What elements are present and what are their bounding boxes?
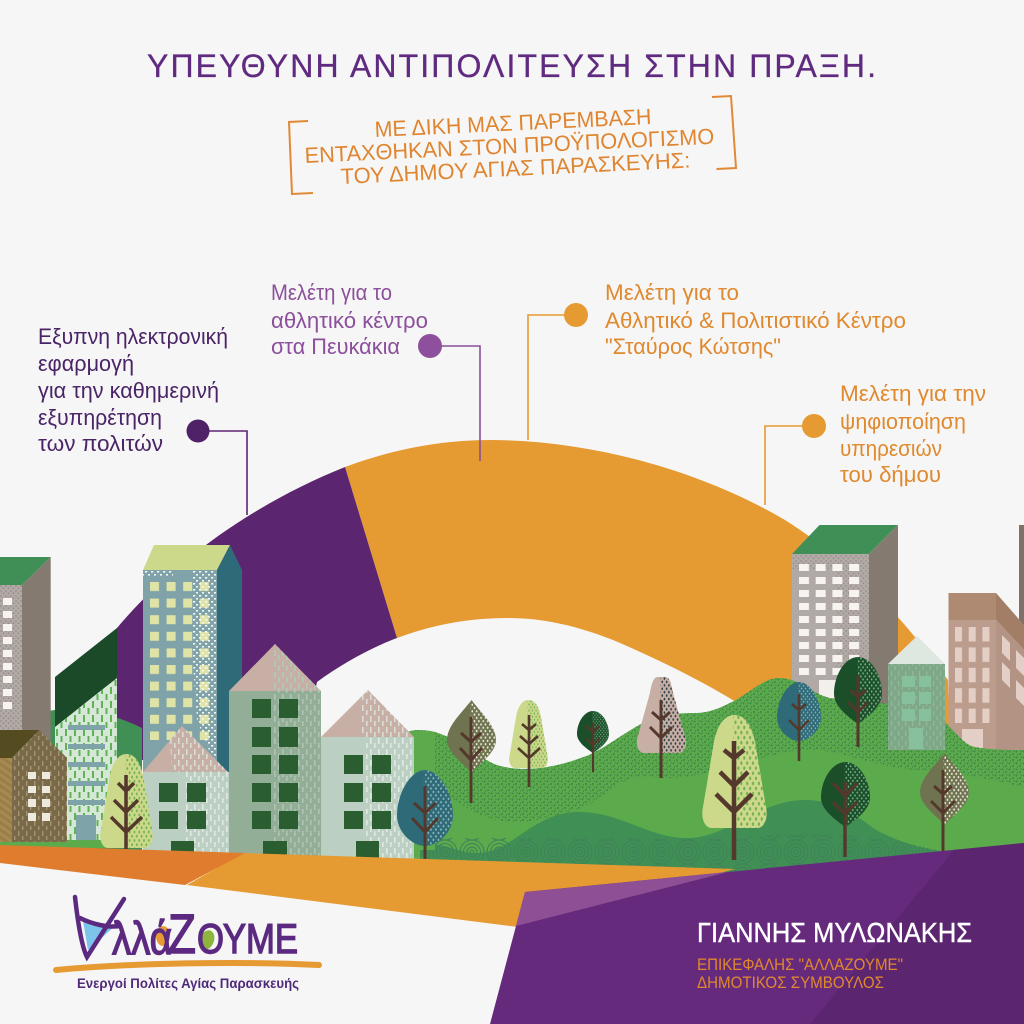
- callout text: Μελέτη για το: [605, 280, 739, 305]
- callout: digitisation: [765, 381, 986, 505]
- tree: small dark: [577, 711, 609, 772]
- logo wordmark: ΟΥΜΕ: [197, 915, 298, 962]
- tree: blue: [777, 682, 821, 761]
- tree: teal: [397, 770, 453, 862]
- callout text: "Σταύρος Κώτσης": [605, 334, 781, 359]
- role: ΕΠΙΚΕΦΑΛΗΣ "ΑΛΛΑΖΟΥΜΕ": [697, 955, 903, 974]
- wooden house: [0, 730, 67, 842]
- callout text: των πολιτών: [38, 431, 163, 456]
- logo mark: blue triangle: [83, 921, 115, 950]
- tree: pink cone: [637, 677, 686, 778]
- marker: [418, 334, 442, 358]
- callout: smart app: [38, 324, 247, 515]
- callout text: Αθλητικό & Πολιτιστικό Κέντρο: [605, 308, 906, 333]
- stippled hill band: [400, 678, 1024, 822]
- callout text: του δήμου: [840, 462, 941, 487]
- callout: sports centre Pefkakia: [271, 280, 480, 461]
- callout text: εφαρμογή: [38, 351, 134, 376]
- leader line: [528, 315, 576, 440]
- darker front hill: [420, 800, 945, 880]
- marker: [564, 303, 588, 327]
- logo wordmark: [112, 902, 298, 965]
- left bracket: [289, 121, 313, 194]
- callout text: [38, 324, 228, 456]
- subtitle text: ΕΝΤΑΧΘΗΚΑΝ ΣΤΟΝ ΠΡΟΫΠΟΛΟΓΙΣΜΟ: [304, 124, 715, 168]
- callout text: ψηφιοποίηση: [840, 409, 966, 434]
- far right tower edge: [1019, 525, 1024, 625]
- logo: [56, 897, 319, 991]
- subtitle text: ΜΕ ΔΙΚΗ ΜΑΣ ΠΑΡΕΜΒΑΣΗ: [374, 104, 652, 142]
- dark facet: [810, 843, 1024, 1024]
- arc segment: purple: [100, 467, 397, 760]
- subtitle text: ΤΟΥ ΔΗΜΟΥ ΑΓΙΑΣ ΠΑΡΑΣΚΕΥΗΣ:: [340, 148, 691, 189]
- tree: olive leaf: [447, 700, 496, 803]
- logo swoosh: [56, 963, 319, 970]
- role: [697, 955, 903, 992]
- callout text: αθλητικό κέντρο: [271, 308, 428, 333]
- tree: pale yellow: [509, 700, 548, 787]
- dark orange band: [0, 845, 245, 885]
- tree: big yellow: [702, 715, 767, 860]
- tree: yellow left: [100, 754, 153, 850]
- right bracket: [712, 96, 736, 169]
- logo wordmark: λλά: [112, 912, 172, 964]
- arc segment: orange: [345, 440, 950, 760]
- subtitle with brackets: [289, 96, 736, 194]
- green stipple hump: [395, 731, 435, 850]
- callout text: Εξυπνη ηλεκτρονική: [38, 324, 228, 349]
- logo colour dots: [156, 926, 170, 946]
- swirl ground texture: [420, 834, 945, 880]
- left grey tower: [0, 557, 51, 745]
- left city: [0, 545, 435, 862]
- light facet: [516, 872, 728, 926]
- right house: [321, 690, 414, 862]
- back hill: [45, 709, 142, 850]
- dark green building: [55, 628, 117, 845]
- title: ΥΠΕΥΘΥΝΗ ΑΝΤΙΠΟΛΙΤΕΥΣΗ ΣΤΗΝ ΠΡΑΞΗ.: [147, 48, 876, 84]
- grey tower: [792, 525, 898, 710]
- tree: olive right: [920, 753, 969, 852]
- name: ΓΙΑΝΝΗΣ ΜΥΛΩΝΑΚΗΣ: [697, 917, 972, 948]
- tree: dark lower: [821, 762, 870, 857]
- callout text: εξυπηρέτηση: [38, 405, 162, 430]
- middle tall house: [229, 644, 321, 861]
- purple panel: [490, 843, 1024, 1024]
- teal tower: [143, 545, 242, 790]
- green house on the hill: [888, 636, 945, 750]
- trees: [100, 657, 969, 862]
- callout text: [840, 381, 986, 487]
- hills: [400, 678, 1024, 880]
- callout text: Μελέτη για το: [271, 280, 392, 305]
- subtitle text: [304, 104, 715, 189]
- logo mark: stylised A: [75, 897, 124, 957]
- callout text: Μελέτη για την: [840, 381, 986, 406]
- leader line: [430, 346, 480, 461]
- tree: dark tall: [834, 657, 882, 747]
- callout text: υπηρεσιών: [840, 436, 942, 461]
- road band: [0, 845, 735, 927]
- buildings behind the hill, right: [792, 525, 1024, 752]
- leader line: [198, 431, 247, 515]
- small house: [143, 726, 229, 856]
- orange band: [187, 853, 735, 927]
- main green hill: [400, 678, 1024, 880]
- role: ΔΗΜΟΤΙΚΟΣ ΣΥΜΒΟΥΛΟΣ: [697, 973, 884, 992]
- callout text: για την καθημερινή: [38, 378, 219, 403]
- leader line: [765, 426, 814, 505]
- marker: [802, 414, 826, 438]
- callout text: [271, 280, 428, 359]
- arc chart: [100, 440, 950, 760]
- grass strip: [0, 840, 140, 848]
- marker: [186, 420, 210, 442]
- pink building: [948, 593, 1024, 752]
- logo wordmark: Ζ: [168, 902, 196, 965]
- callout text: [605, 280, 906, 359]
- callout: athletic and cultural centre: [528, 280, 906, 440]
- panel base: [490, 843, 1024, 1024]
- callout text: στα Πευκάκια: [271, 334, 400, 359]
- logo tagline: Ενεργοί Πολίτες Αγίας Παρασκευής: [77, 975, 299, 991]
